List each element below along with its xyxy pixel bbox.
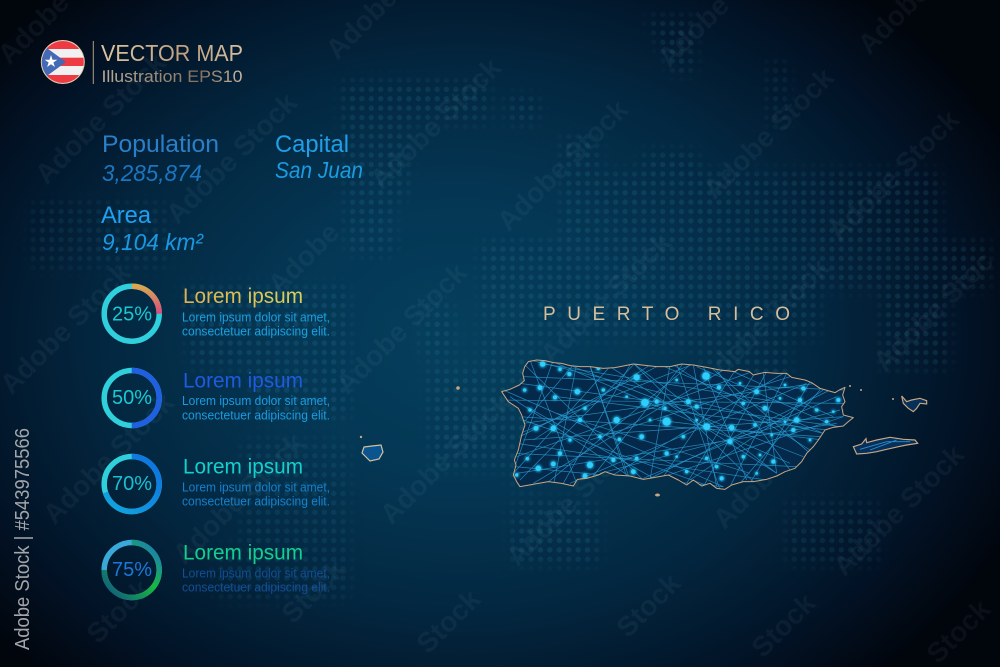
subtitle: Illustration EPS10 <box>102 67 242 86</box>
map: Mona island <box>362 445 383 461</box>
donut: 50% <box>104 370 159 426</box>
item text 2: Lorem ipsum <box>183 369 303 392</box>
stat: capital <box>275 131 363 183</box>
item text 2 <box>182 369 330 423</box>
item text 3: Lorem ipsum dolor sit amet, <box>182 481 330 495</box>
donut: 75%: 75% <box>112 559 152 581</box>
stat: capital: Capital <box>275 131 349 158</box>
watermarks: Adobe Stock <box>822 104 965 247</box>
watermarks: Adobe Stock <box>364 52 507 195</box>
map title: PUERTO RICO <box>543 304 790 325</box>
watermarks: Adobe Stock <box>692 252 835 395</box>
item text 4: Lorem ipsum dolor sit amet, <box>182 567 330 581</box>
donut: 70%: 70% <box>112 473 152 495</box>
watermarks: Adobe Stock <box>491 94 634 237</box>
watermarks: Stock <box>410 583 487 659</box>
stat: population <box>102 131 219 186</box>
item text 2: Lorem ipsum dolor sit amet, <box>182 394 330 408</box>
map: small islets <box>360 385 894 496</box>
watermarks: Adobe Stock <box>29 47 172 190</box>
stat: area: 9,104 km² <box>102 229 204 255</box>
item text 4: consectetuer adipiscing elit. <box>182 581 330 595</box>
item text 4 <box>182 541 330 595</box>
title: vector map: VECTOR MAP <box>101 40 243 66</box>
donut: 25% <box>104 286 159 341</box>
watermarks: Stock <box>80 573 157 649</box>
donut: 50%: 50% <box>112 387 152 409</box>
item text 1: consectetuer adipiscing elit. <box>182 325 330 339</box>
watermarks: Adobe Stoc <box>867 245 999 377</box>
donut: 75% <box>104 542 159 598</box>
watermarks: Stock <box>745 587 822 663</box>
stat: area: Area <box>101 202 152 229</box>
watermarks: Adobe Stock <box>374 387 517 530</box>
watermarks: Adobe Stock <box>167 427 310 570</box>
watermarks: Stock <box>920 593 997 667</box>
stat: population: 3,285,874 <box>102 160 202 186</box>
icon: Puerto Rico flag <box>40 40 86 84</box>
item text 1: Lorem ipsum <box>183 285 303 308</box>
item text 3: Lorem ipsum <box>183 455 303 478</box>
stat: area <box>101 202 204 255</box>
watermarks: Adobe Stock <box>697 62 840 205</box>
watermarks: Adobe Stock <box>500 429 643 572</box>
watermarks: Adobe Stock <box>707 392 850 535</box>
header divider <box>93 41 94 84</box>
watermarks: Stock <box>275 553 352 629</box>
map: Culebra island <box>902 396 927 412</box>
watermarks: Adobe <box>262 217 345 300</box>
watermarks: Adobe Stock <box>37 387 180 530</box>
watermarks: Adobe Stock <box>160 87 303 230</box>
watermarks: Adobe Stock <box>534 227 677 370</box>
watermarks: Stock <box>610 567 687 643</box>
map: Puerto Rico main island <box>500 360 853 490</box>
watermarks: Adobe Stock <box>330 257 473 400</box>
watermarks: Adobe Stock <box>827 439 970 582</box>
donut: 25%: 25% <box>112 304 152 326</box>
item text 3 <box>182 455 330 509</box>
map: Vieques island <box>853 437 918 454</box>
item text 1: Lorem ipsum dolor sit amet, <box>182 311 330 325</box>
stat: capital: San Juan <box>275 157 363 183</box>
stock credit: Adobe Stock | #543975566 <box>12 428 34 650</box>
item text 3: consectetuer adipiscing elit. <box>182 495 330 509</box>
stat: population: Population <box>102 131 219 158</box>
item text 4: Lorem ipsum <box>183 541 303 564</box>
donut: 70% <box>104 456 159 512</box>
item text 1 <box>182 285 330 339</box>
item text 2: consectetuer adipiscing elit. <box>182 409 330 423</box>
